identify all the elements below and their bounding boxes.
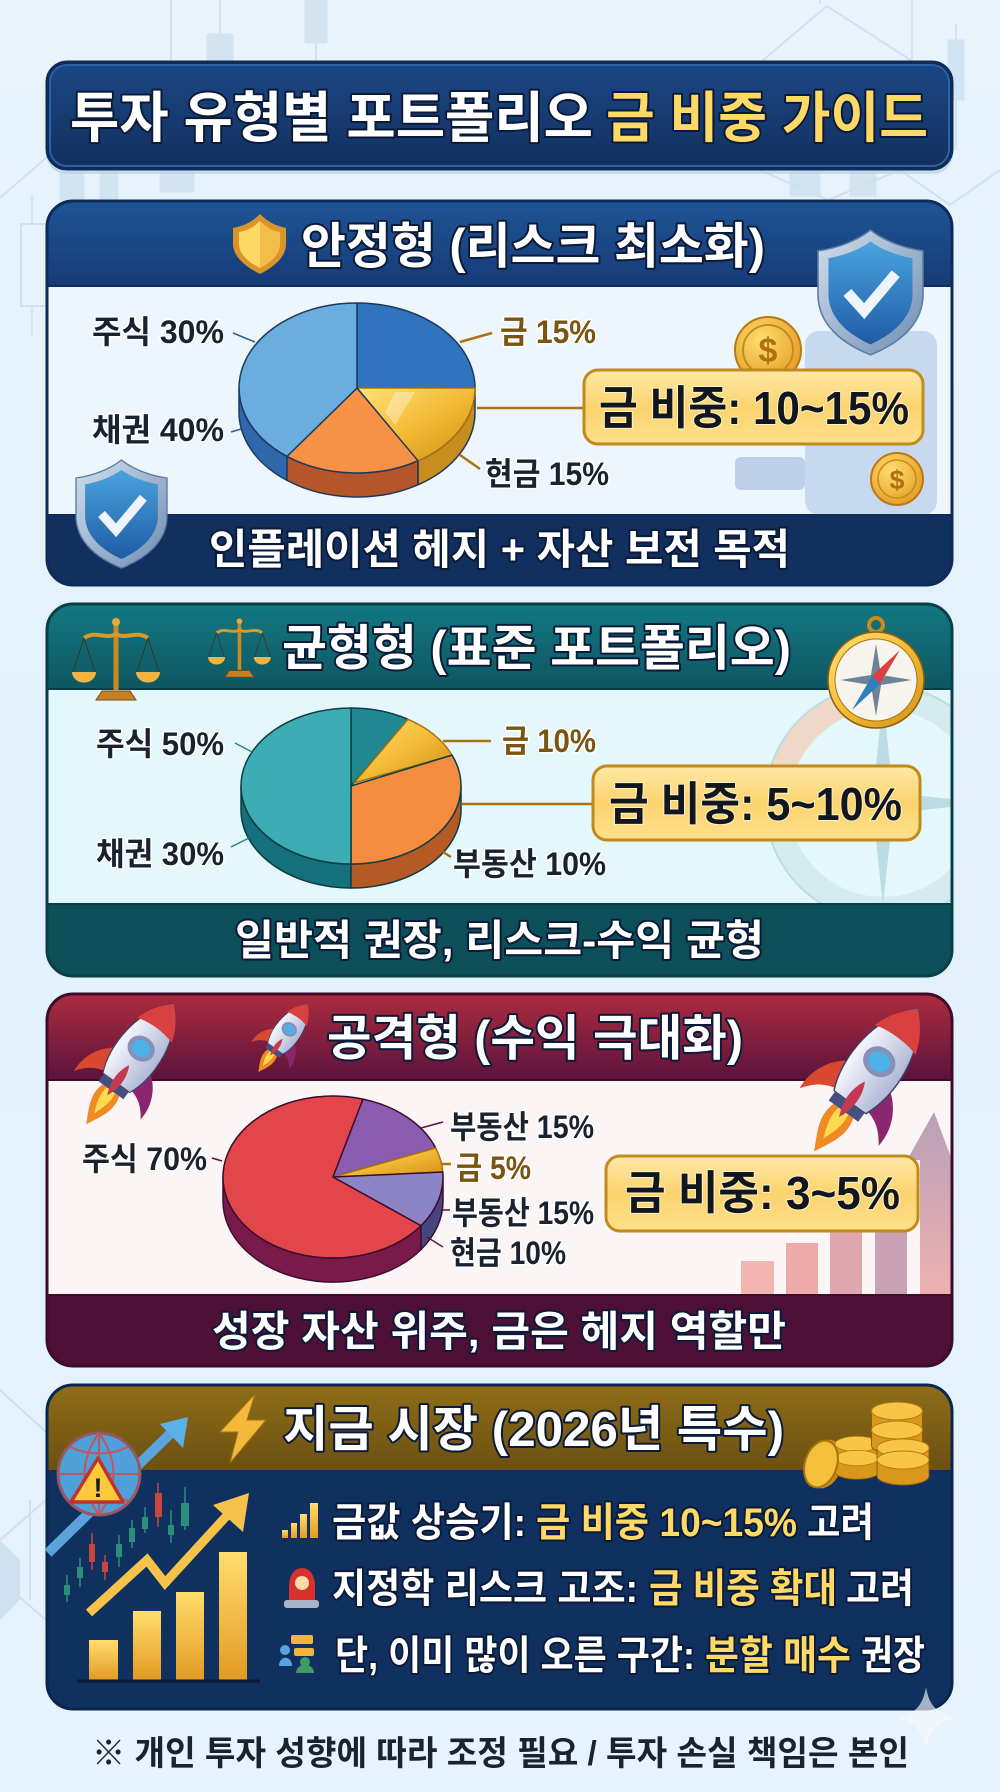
arrow: gold zigzag [89,1493,249,1613]
title banner [46,62,953,174]
label 주식 70%: 주식 70% [82,1141,207,1177]
leader lines gold 1 [460,333,583,469]
icon: signal bars [282,1503,318,1538]
heading 안정형: 안정형 (리스크 최소화) [301,220,765,274]
pie chart 1 [239,303,475,497]
icon: small shield [76,460,167,568]
bullet 3: 권장 [861,1634,925,1678]
panel 1 frame [46,200,953,586]
leader line gold 3 [441,1163,451,1165]
bullet 1 [332,1501,874,1545]
icon: rocket small [239,990,327,1086]
panel 3 frame [46,993,953,1367]
pie chart 2 [241,708,461,888]
bullet 3 highlight: 분할 매수 [705,1634,851,1678]
icon: gold coins [798,1402,929,1493]
bullet 1 highlight: 금 비중 10~15% [536,1501,797,1545]
callout 1: 금 비중: 10~15% [599,382,909,434]
icon: coin top [735,317,801,383]
panel 4 frame [46,1384,953,1710]
callout 3 [606,1156,918,1231]
pie chart 3 [223,1096,443,1282]
bar chart: gold bars [77,1552,260,1681]
icon: coin bottom [871,453,923,505]
label 부동산 10%: 부동산 10% [453,846,606,882]
callout 3: 금 비중: 3~5% [625,1167,900,1219]
panel: 공격형 [46,979,958,1367]
icon: compass [828,618,924,728]
bullet 2 highlight: 금 비중 확대 [649,1567,837,1611]
leader lines gold 2 [443,741,593,857]
label 부동산 15% second: 부동산 15% [452,1195,594,1231]
icon: globe warning: ! [94,1473,102,1503]
icon: lightning [220,1394,266,1463]
icon: rocket left [53,979,207,1149]
label 주식 50%: 주식 50% [96,726,224,762]
heading 지금 시장: 지금 시장 (2026년 특수) [283,1403,784,1457]
icon: people [279,1635,314,1673]
bullet 2 [332,1567,914,1611]
title text white: 투자 유형별 포트폴리오 [70,87,593,149]
icon: blue arrow [48,1417,188,1553]
footnote: ※ 개인 투자 성향에 따라 조정 필요 / 투자 손실 책임은 본인 [92,1735,909,1773]
icon: candles [64,1483,189,1602]
leader lines 3 [212,1122,450,1247]
panel: 균형형 [46,603,1000,977]
label 부동산 15%: 부동산 15% [450,1109,594,1145]
heading 균형형: 균형형 (표준 포트폴리오) [282,622,791,676]
label 채권 40%: 채권 40% [92,412,224,448]
panel: 안정형 [46,200,953,586]
icon: siren [284,1568,319,1608]
label 금 15%: 금 15% [500,314,596,350]
bullet 1: 금값 상승기: [332,1501,526,1545]
footer text 2: 일반적 권장, 리스크-수익 균형 [235,917,764,964]
title text gold: 금 비중 가이드 [606,87,928,149]
callout 1 [584,370,923,444]
bullet 1: 고려 [807,1501,874,1545]
leader lines 1 [231,333,255,432]
label 금 10%: 금 10% [502,723,596,759]
callout 2: 금 비중: 5~10% [609,778,902,830]
bullet 3 [335,1634,925,1678]
panel 2 frame [46,603,1000,977]
label 주식 30%: 주식 30% [92,314,224,350]
bullet 2: 지정학 리스크 고조: [332,1567,638,1611]
panel: 지금 시장 [46,1384,953,1710]
bullet 3: 단, 이미 많이 오른 구간: [335,1634,695,1678]
callout 2 [593,766,920,840]
label 금 5%: 금 5% [456,1150,531,1186]
icon: gold shield [233,214,286,274]
heading 공격형: 공격형 (수익 극대화) [327,1012,743,1066]
label 채권 30%: 채권 30% [96,836,224,872]
icon: coin top: $ [759,332,778,370]
label 현금 15%: 현금 15% [485,456,609,492]
icon: rocket right [774,980,958,1180]
icon: coin bottom: $ [889,465,905,495]
footer text 3: 성장 자산 위주, 금은 헤지 역할만 [212,1308,786,1355]
icon: scales small [208,618,271,677]
icon: scales large [72,618,160,700]
bullet 2: 고려 [846,1567,914,1611]
icon: globe warning [58,1433,140,1515]
footer text 1: 인플레이션 헤지 + 자산 보전 목적 [209,526,790,573]
label 현금 10%: 현금 10% [450,1235,566,1271]
decorative sparkle [896,1687,958,1750]
leader lines 2 [231,743,252,847]
icon: big shield [818,230,923,355]
